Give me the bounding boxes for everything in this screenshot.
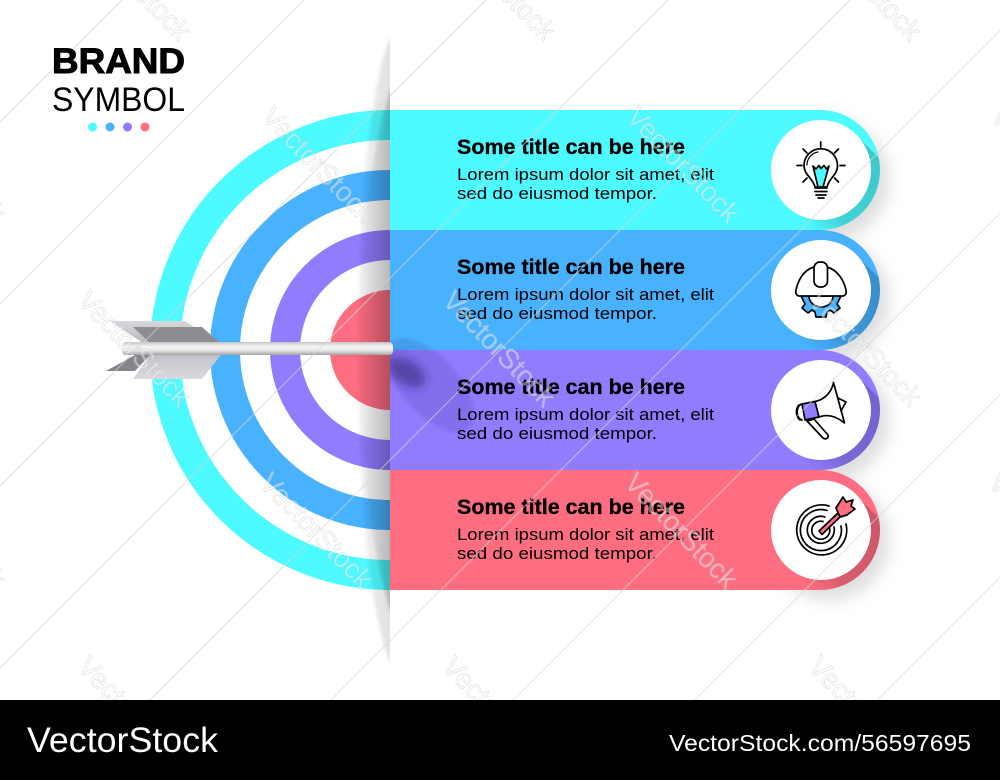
- title: BRAND SYMBOL: BRAND: [52, 42, 185, 81]
- fletching top dark: [133, 327, 220, 343]
- panel 2: blue: [390, 230, 880, 350]
- watermarks: VectorStock: [619, 467, 744, 595]
- fletching top light: [110, 321, 222, 345]
- rim shadow 4: [808, 500, 880, 590]
- text 4: Some title can be here: [457, 496, 685, 519]
- icon: target with arrow: [797, 497, 855, 555]
- watermarks: VectorStock: [72, 651, 197, 779]
- text 3: Some title can be here: [457, 376, 685, 399]
- shaft: [122, 342, 393, 355]
- watermarks: VectorStock: [621, 101, 746, 229]
- rim shadow 1: [808, 140, 880, 230]
- text 3: [457, 376, 714, 443]
- circle 1: [771, 120, 871, 220]
- text 2: [457, 256, 714, 323]
- footer url: VectorStock.com/56597695: [669, 730, 971, 756]
- target: concentric half rings: [152, 110, 390, 590]
- target board edge shadow: [358, 38, 390, 662]
- watermarks: VectorStock: [437, 651, 562, 779]
- panel 1: cyan: [390, 110, 880, 230]
- title: BRAND SYMBOL: SYMBOL: [52, 81, 185, 119]
- text 2: Lorem ipsum dolor sit amet, elit: [457, 286, 714, 304]
- fletching bottom light: [130, 347, 227, 379]
- text 3: sed do eiusmod tempor.: [457, 425, 657, 443]
- title: BRAND SYMBOL: [52, 42, 185, 132]
- watermarks: VectorStock: [803, 651, 928, 779]
- arrow shadow on panels: [390, 337, 474, 432]
- text 3: Lorem ipsum dolor sit amet, elit: [457, 406, 714, 424]
- text 2: sed do eiusmod tempor.: [457, 305, 657, 323]
- text 1: Lorem ipsum dolor sit amet, elit: [457, 166, 714, 184]
- fletching bottom dark: [106, 355, 150, 371]
- soft panel drop shadows: [769, 120, 889, 600]
- text 1: [457, 136, 714, 203]
- circle 2: [771, 240, 871, 340]
- text 4: sed do eiusmod tempor.: [457, 545, 657, 563]
- icon: megaphone: [796, 382, 846, 439]
- panel 4: red: [390, 470, 880, 590]
- icon: helmet and gear: [796, 262, 846, 317]
- rim shadow 2: [808, 260, 880, 350]
- circle 4: [771, 480, 871, 580]
- text 4: [457, 496, 714, 563]
- watermarks: VectorStock: [254, 467, 379, 595]
- footer logo: VectorStock: [27, 721, 219, 760]
- watermarks: VectorStock: [437, 285, 562, 413]
- arrow: [106, 321, 393, 379]
- text 1: Some title can be here: [457, 136, 685, 159]
- text 1: sed do eiusmod tempor.: [457, 185, 657, 203]
- circle 3: [771, 360, 871, 460]
- text 2: Some title can be here: [457, 256, 685, 279]
- watermarks: VectorStock: [256, 101, 381, 229]
- icon: light bulb: [797, 142, 845, 198]
- watermarks: VectorStock: [72, 285, 197, 413]
- rim shadow 3: [808, 380, 880, 470]
- footer bar: [0, 700, 1000, 780]
- text 4: Lorem ipsum dolor sit amet, elit: [457, 526, 714, 544]
- panel 3: purple: [390, 337, 880, 470]
- watermarks: VectorStock: [803, 285, 928, 413]
